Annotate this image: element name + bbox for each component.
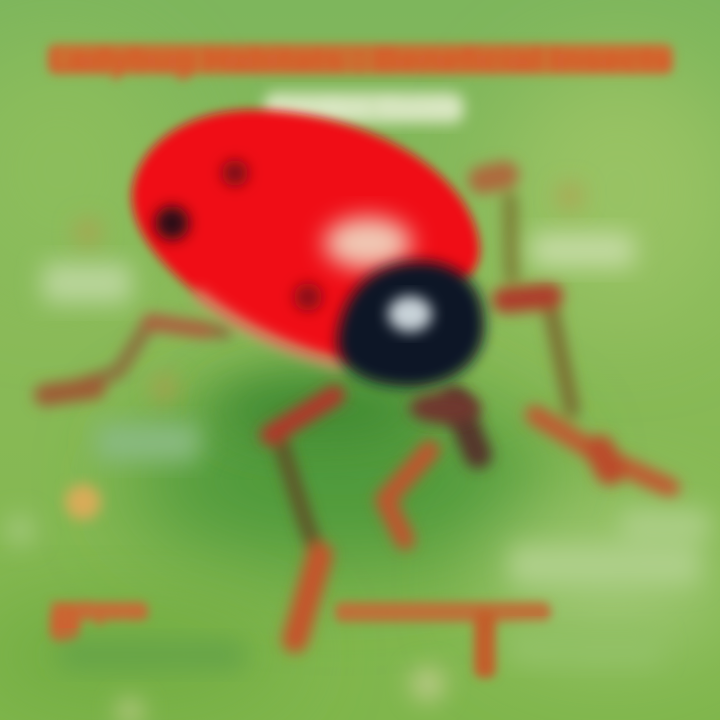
footer text block: left: Plant flowers nearby (62, 645, 243, 667)
head underside (409, 392, 481, 424)
icon: ladybug shell (132, 110, 480, 362)
icon: small orange marker (65, 484, 101, 520)
bottom pale specks (5, 515, 445, 720)
small orange accents (77, 185, 581, 399)
ladybug illustration (45, 110, 670, 640)
text block: lower left label: Shelter (98, 430, 199, 455)
footer text block: right (510, 630, 660, 664)
text block: pale lower right labels: Natural pest control (510, 554, 690, 579)
text block: lower left label (95, 422, 200, 462)
text block: left label (42, 262, 132, 304)
footer heading: right (335, 599, 552, 678)
text block: right label (530, 232, 635, 268)
icon: ladybug legs (45, 175, 670, 640)
text block: left label: Diet (44, 270, 131, 295)
footer text block: right: Eats aphids (512, 638, 658, 660)
footer heading: left (50, 596, 150, 642)
lower pink shell rim (195, 292, 345, 366)
footer text block: left (60, 640, 245, 670)
text block: pale lower right labels (510, 510, 710, 585)
title: Ladybug Habitats : Beneficial Insects (48, 39, 672, 80)
text block: right label: Habitat (532, 238, 633, 263)
footer heading: right: Beneficial role (338, 599, 552, 626)
head highlight (388, 296, 432, 332)
subtitle: pale label above the beetle: Garden Guide (266, 92, 462, 122)
footer heading: left: Tips (50, 596, 150, 626)
pale thorax highlight (324, 217, 412, 269)
icon: ladybug head (338, 262, 485, 387)
icon: shell spots (155, 160, 322, 311)
